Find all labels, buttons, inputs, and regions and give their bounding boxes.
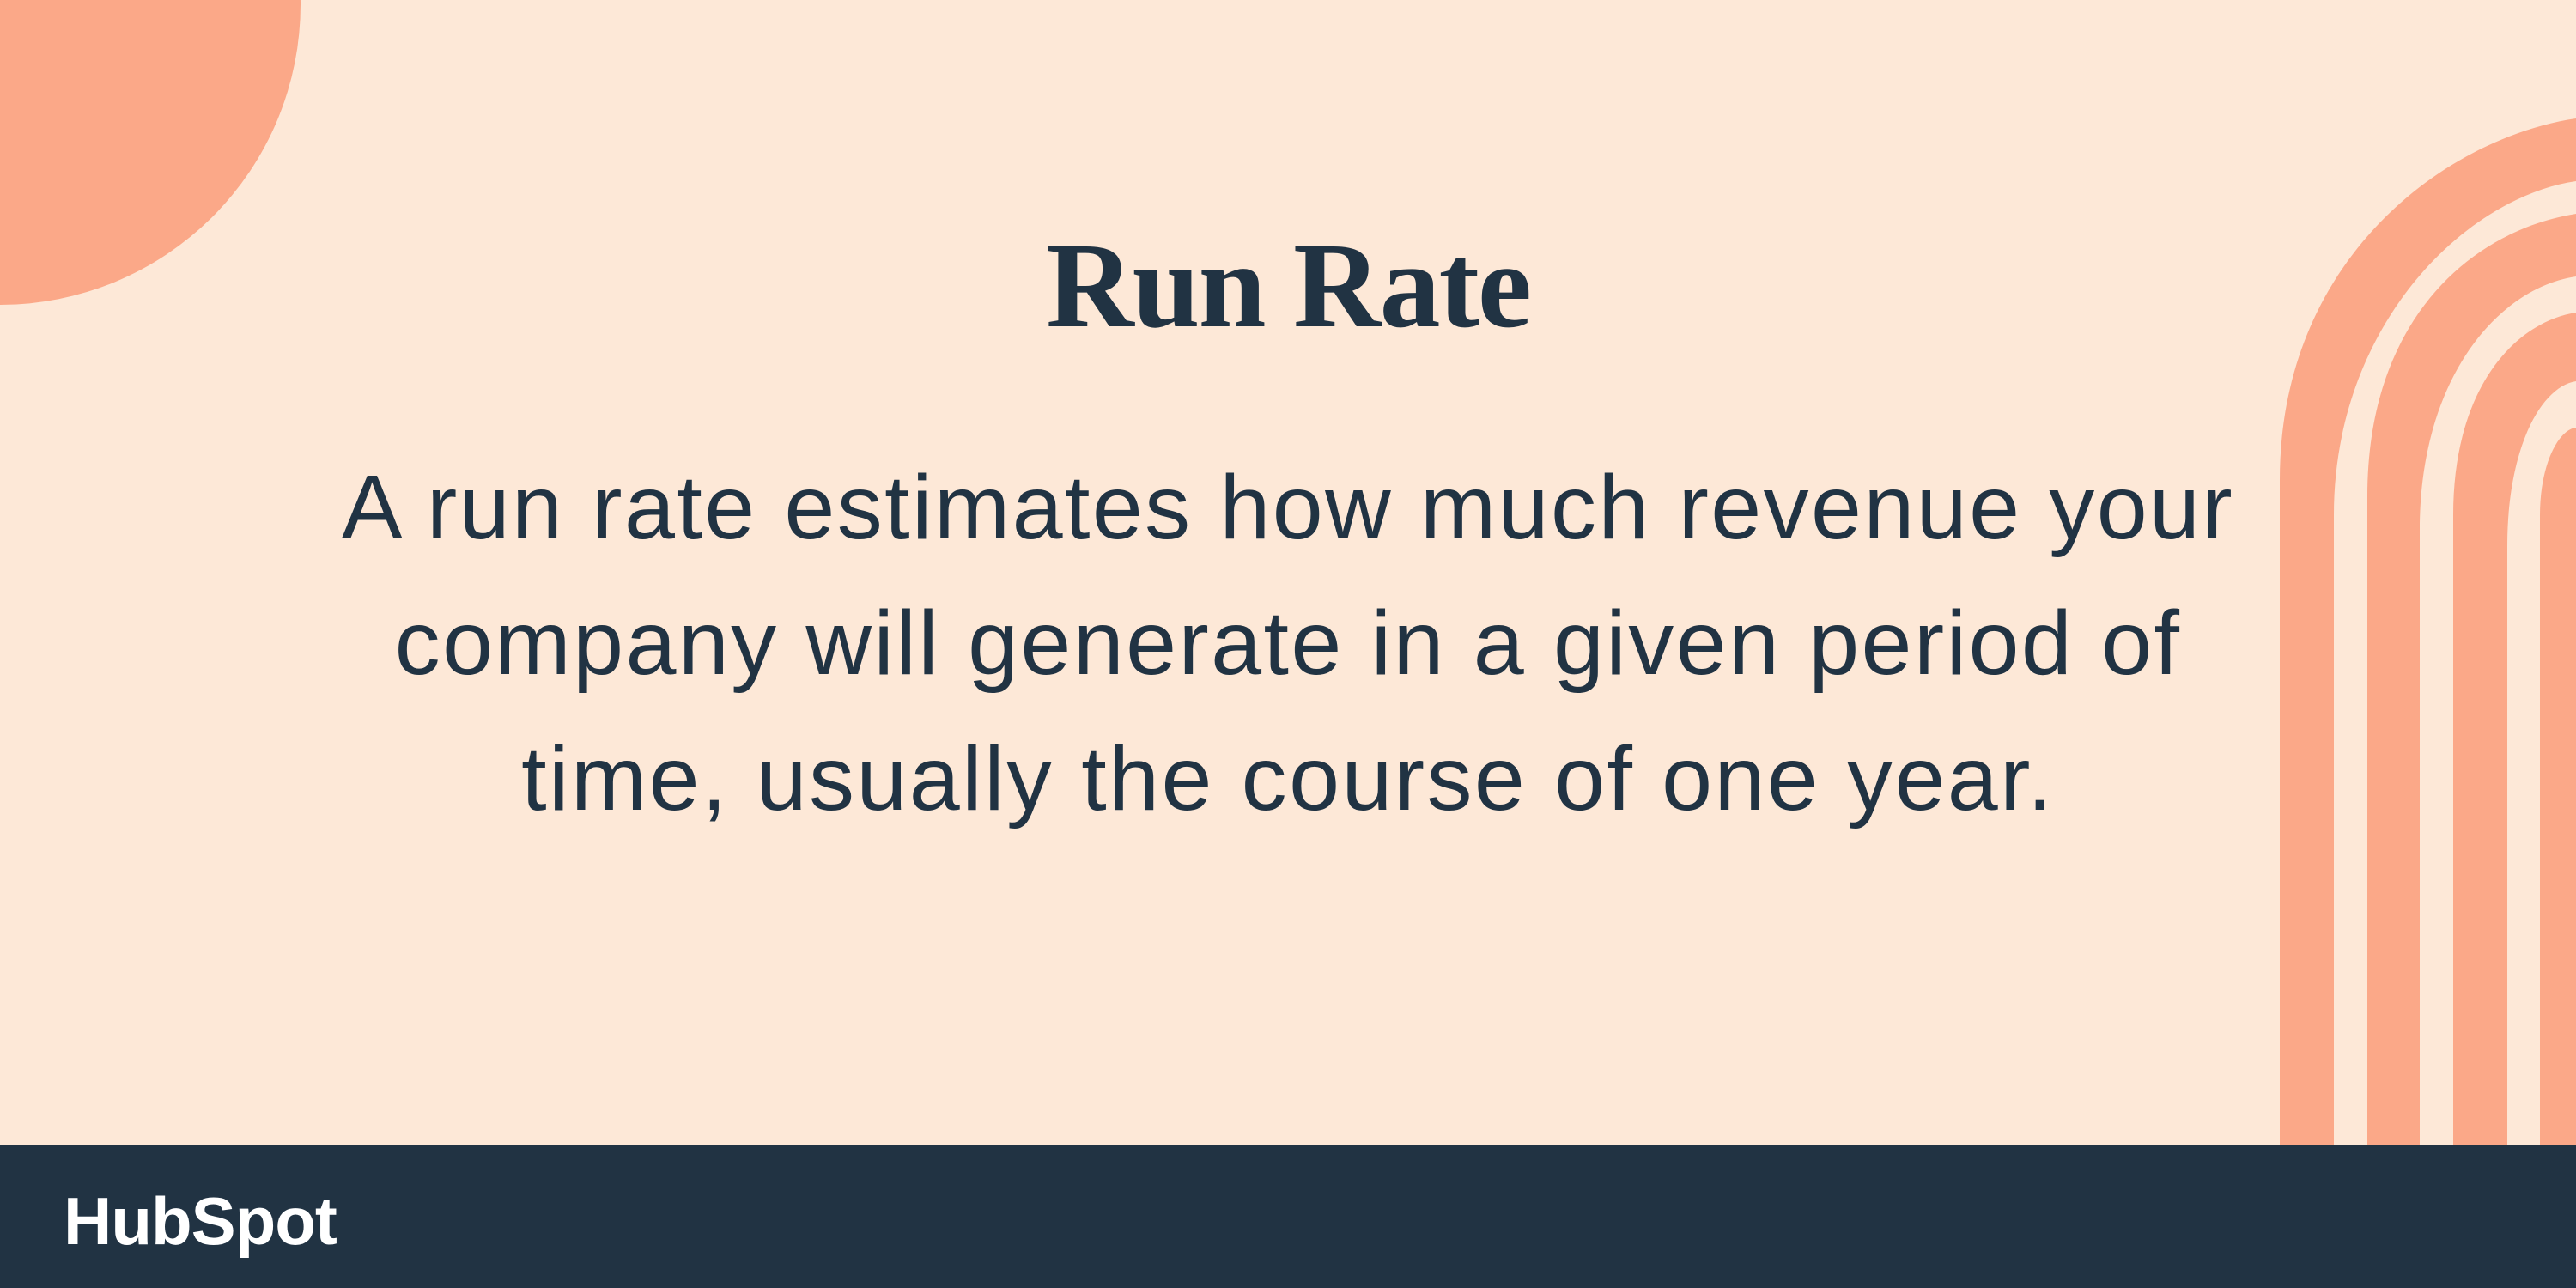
decoration: top-left circle	[0, 0, 301, 305]
text block: definition: company will generate in a given period of	[395, 592, 2181, 694]
text block: definition: A run rate estimates how much revenue your	[342, 457, 2234, 558]
logo: HubSpot: HubSpot	[64, 1183, 337, 1259]
text block: definition: time, usually the course of one year.	[521, 728, 2055, 829]
footer bar	[0, 1145, 2576, 1288]
title: Run Rate	[1046, 217, 1530, 353]
text block: definition	[342, 457, 2234, 829]
